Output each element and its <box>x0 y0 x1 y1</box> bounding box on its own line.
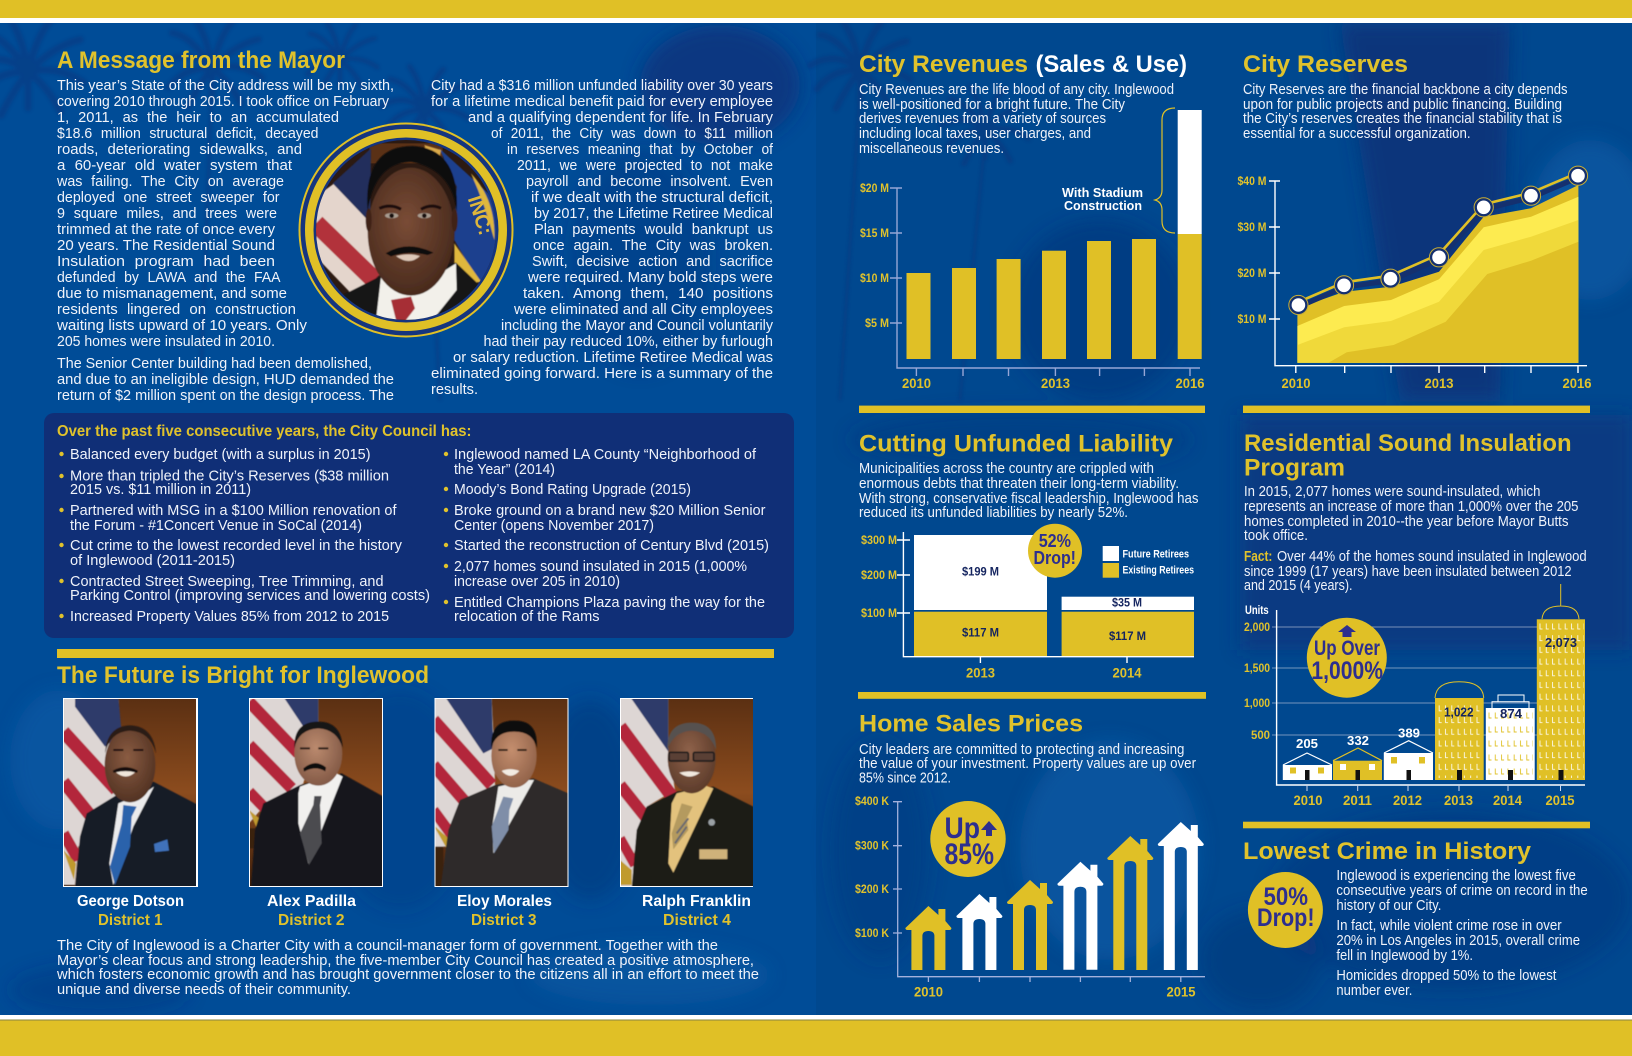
text block: crime description: history of our City. <box>1336 897 1441 914</box>
callout: 50% drop: 50% <box>1264 883 1308 911</box>
text block: mayor message left column <box>56 77 394 404</box>
building chart: homes insulated: 500 <box>1251 730 1270 742</box>
building: 2015 <box>1537 584 1585 780</box>
legend: retirees: Existing Retirees <box>1122 565 1194 577</box>
area chart: reserves: $30 M <box>1238 222 1266 234</box>
bullet list: left column: Increased Property Values 85% from 2012 to 2015 <box>70 608 389 625</box>
text block: mayor message right column: and a qualifying dependent for life. In February <box>468 109 773 126</box>
text block: reserves description: essential for a successful organization. <box>1243 125 1471 142</box>
bottom gold band <box>0 1015 1632 1056</box>
text block: mayor message left column: covering 2010 through 2015. I took office on February <box>57 93 389 110</box>
heading: lowest crime: Lowest Crime in History <box>1243 838 1532 865</box>
house chart: home prices: $400 K <box>855 796 890 808</box>
bar chart: revenues <box>860 108 1205 391</box>
house: 2010: 205 <box>1296 736 1318 751</box>
bar chart: revenues: Construction <box>1064 198 1142 213</box>
text block: crime description: fell in Inglewood by 1%. <box>1336 947 1473 964</box>
area chart: reserves: $10 M <box>1238 314 1266 326</box>
bullet list: left column <box>59 446 430 625</box>
stacked bar chart: liability <box>861 524 1194 681</box>
callout: up over 1,000% <box>1307 618 1387 698</box>
panel: a message from the mayor <box>56 47 774 404</box>
text block: mayor message left column: was failing. The City on average <box>56 173 284 190</box>
text block: council description: unique and diverse needs of their community. <box>57 981 351 998</box>
heading: sound insulation: Residential Sound Insulation <box>1244 430 1572 457</box>
text block: revenues description: derives revenues from a variety of sources <box>859 110 1106 127</box>
house: 2010 <box>1283 736 1332 780</box>
text block: mayor message left column: and due to an ineligible design, HUD demanded the <box>57 371 394 388</box>
bullet list: left column: More than tripled the City’s Reserves ($38 million <box>70 468 389 484</box>
text block: insulation description: homes completed in 2010--the year before Mayor Butts <box>1244 513 1568 530</box>
bullet list: left column: of Inglewood (2011-2015) <box>70 552 235 569</box>
bar chart: revenues: 2010 <box>902 376 931 391</box>
text block: mayor message right column: were eliminated and all City employees <box>513 301 773 318</box>
text block: mayor message left column: 205 homes were insulated in 2010. <box>57 333 275 350</box>
text block: crime description: Homicides dropped 50% to the lowest <box>1336 967 1557 984</box>
house chart: home prices: $100 K <box>855 928 890 940</box>
top gold band <box>0 0 1632 23</box>
house: 2012 <box>1384 726 1433 780</box>
text block: mayor message left column: roads, deteriorating sidewalks, and <box>57 141 302 158</box>
text block: insulation description: represents an increase of more than 1,000% over the 205 <box>1244 498 1578 515</box>
house: 2011: 332 <box>1347 733 1369 748</box>
council names and districts: District 4 <box>663 912 731 929</box>
area chart: reserves: 2013 <box>1424 376 1454 391</box>
text block: mayor message left column: trimmed at the rate of once every <box>57 221 275 238</box>
text block: mayor message right column: including the Mayor and Council voluntarily <box>501 317 773 334</box>
building: 2015: 2,073 <box>1545 636 1577 650</box>
text block: liability description: With strong, conservative fiscal leadership, Inglewood has <box>859 490 1198 507</box>
text block: insulation description: since 1999 (17 years) have been insulated between 2012 <box>1244 563 1572 580</box>
text block: reserves description: City Reserves are the financial backbone a city depends <box>1243 81 1568 98</box>
heading: city revenues <box>859 51 1187 78</box>
text block: revenues description: miscellaneous revenues. <box>859 140 1004 157</box>
heading: city revenues: City Revenues <box>859 51 1028 78</box>
bullet list: left column: the Forum - #1Concert Venue in SoCal (2014) <box>70 517 362 534</box>
bullet list: right column: the Year” (2014) <box>454 461 555 478</box>
building chart: homes insulated: 2014 <box>1493 793 1522 808</box>
building chart: homes insulated: 2013 <box>1444 793 1473 808</box>
house chart: home prices: 2015 <box>1166 985 1196 1000</box>
building: 2013 <box>1435 682 1484 780</box>
legend: retirees: Future Retirees <box>1122 549 1189 561</box>
callout: 52% drop <box>1028 524 1082 578</box>
house chart: home prices: $300 K <box>855 841 890 853</box>
bullet list: right column: Entitled Champions Plaza paving the way for the <box>454 594 765 611</box>
text block: insulation description: In 2015, 2,077 homes were sound-insulated, which <box>1244 483 1540 500</box>
text block: mayor message left column: due to mismanagement, and some <box>57 285 287 302</box>
bar chart: revenues: With Stadium <box>1062 185 1143 200</box>
legend: retirees <box>1103 546 1194 578</box>
text block: revenues description <box>859 81 1174 157</box>
bar chart: revenues: 2013 <box>1041 376 1070 391</box>
text block: mayor message right column: or salary reduction. Lifetime Retiree Medical was <box>453 349 773 366</box>
text block: mayor message right column: taken. Among them, 140 positions <box>523 285 773 302</box>
heading: future is bright: The Future is Bright for Inglewood <box>57 662 429 689</box>
text block: insulation description: Fact: <box>1244 548 1272 565</box>
text block: revenues description: City Revenues are the life blood of any city. Inglewood <box>859 81 1174 98</box>
text block: mayor message right column: payroll and become insolvent. Even <box>526 173 773 190</box>
building chart: homes insulated: 1,000 <box>1244 698 1270 710</box>
text block: reserves description: the City’s reserves creates the financial stability that is <box>1243 110 1562 127</box>
portrait: mayor in gold ring <box>298 122 514 338</box>
text block: mayor message right column: in reserves meaning that by October of <box>507 141 774 158</box>
bullet list: right column: Broke ground on a brand new $20 Million Senior <box>454 502 766 519</box>
heading: sound insulation <box>1244 430 1572 482</box>
text block: mayor message left column: deployed one street sweeper for <box>57 189 280 206</box>
text block: mayor message left column: 9 square miles, and trees were <box>57 205 277 222</box>
text block: mayor message left column: $18.6 million structural deficit, decayed <box>57 125 318 142</box>
text block: insulation description <box>1244 483 1587 594</box>
callout: 52% drop: 52% <box>1039 531 1071 551</box>
text block: mayor message left column: This year’s State of the City address will be my sixth, <box>57 77 394 94</box>
callout: up 85% <box>930 801 1006 877</box>
text block: insulation description: took office. <box>1244 527 1308 544</box>
text block: mayor message right column: for a lifetime medical benefit paid for every employee <box>431 93 773 110</box>
bar chart: revenues: $5 M <box>865 318 889 330</box>
bullet list: right column: relocation of the Rams <box>454 608 600 625</box>
text block: crime description <box>1336 867 1588 999</box>
text block: insulation description: and 2015 (4 years). <box>1244 577 1352 594</box>
bullet list: left column: Cut crime to the lowest recorded level in the history <box>70 537 402 554</box>
heading: unfunded liability: Cutting Unfunded Liability <box>859 431 1174 458</box>
bullet list: right column: Started the reconstruction of Century Blvd (2015) <box>454 537 769 554</box>
stacked bar chart: liability: $200 M <box>861 570 897 582</box>
stacked bar chart: liability: $100 M <box>861 608 897 620</box>
text block: revenues description: is well-positioned for a bright future. The City <box>859 96 1125 113</box>
panel: cutting unfunded liability <box>859 431 1198 681</box>
text block: mayor message left column: return of $2 million spent on the design process. The <box>57 387 394 404</box>
text block: crime description: number ever. <box>1336 982 1412 999</box>
text block: home sales description: the value of your investment. Property values are up over <box>859 755 1196 772</box>
building: 2013: 1,022 <box>1444 706 1474 720</box>
bar chart: revenues: $15 M <box>860 228 889 240</box>
house chart: home prices: $200 K <box>855 884 890 896</box>
council names and districts <box>77 893 751 929</box>
text block: mayor message left column: The Senior Center building had been demolished, <box>57 355 372 372</box>
heading: home sales prices: Home Sales Prices <box>859 711 1083 738</box>
house: 2011 <box>1333 733 1382 780</box>
panel: city council accomplishments <box>44 413 794 638</box>
bullet list: right column: Moody’s Bond Rating Upgrade (2015) <box>454 481 691 498</box>
stacked bar chart: liability: $35 M <box>1112 598 1142 610</box>
bar chart: revenues: $10 M <box>860 273 889 285</box>
bar chart: revenues: 2016 <box>1176 376 1205 391</box>
callout: up 85%: 85% <box>944 838 994 871</box>
heading: city revenues: (Sales & Use) <box>1036 51 1187 78</box>
text block: mayor message left column: 20 years. The Residential Sound <box>57 237 275 254</box>
panel: residential sound insulation program <box>1244 430 1587 808</box>
heading: message from the mayor: A Message from the Mayor <box>57 47 345 74</box>
heading: sound insulation: Program <box>1244 455 1345 482</box>
area chart: reserves <box>1238 166 1592 391</box>
text block: mayor message right column: had their pay reduced 10%, either by furlough <box>484 333 773 350</box>
text block: reserves description: upon for public projects and public financing. Building <box>1243 96 1562 113</box>
house: 2012: 389 <box>1398 726 1420 741</box>
photo: George Dotson <box>63 697 200 888</box>
text block: mayor message left column: Insulation program had been <box>57 253 275 270</box>
building chart: homes insulated: 2011 <box>1343 793 1372 808</box>
bullet list: right column: Center (opens November 2017) <box>454 517 654 534</box>
stacked bar chart: liability: $117 M <box>1109 631 1146 643</box>
panel: lowest crime in history <box>1243 838 1588 999</box>
text block: home sales description <box>859 741 1196 787</box>
text block: insulation description: Over 44% of the homes sound insulated in Inglewood <box>1277 548 1587 565</box>
text block: liability description: enormous debts that threaten their long-term viability. <box>859 475 1179 492</box>
council names and districts: District 3 <box>471 912 537 929</box>
council names and districts: District 1 <box>98 912 163 929</box>
text block: mayor message right column: once again. The City was broken. <box>533 237 773 254</box>
callout: 50% drop <box>1248 872 1323 948</box>
text block: crime description: In fact, while violent crime rose in over <box>1336 917 1562 934</box>
council names and districts: Eloy Morales <box>457 893 552 910</box>
text block: mayor message right column: eliminated going forward. Here is a summary of the <box>431 365 773 382</box>
photo: Eloy Morales <box>433 697 570 888</box>
bar chart: revenues: $20 M <box>860 183 889 195</box>
text block: mayor message right column <box>431 77 774 398</box>
text block: mayor message right column: Swift, decisive action and sacrifice <box>532 253 773 270</box>
bullet list: right column: increase over 205 in 2010) <box>454 573 620 590</box>
bullet list: left column: 2015 vs. $11 million in 2011) <box>70 481 251 498</box>
council names and districts: George Dotson <box>77 893 184 910</box>
building chart: homes insulated: 2012 <box>1393 793 1422 808</box>
text block: mayor message left column: defunded by LAWA and the FAA <box>57 269 280 286</box>
photo: Alex Padilla <box>249 697 386 888</box>
council names and districts: Ralph Franklin <box>642 893 751 910</box>
house chart: home prices: 2010 <box>914 985 943 1000</box>
text block: mayor message right column: if we dealt with the structural deficit, <box>531 189 773 206</box>
text block: crime description: 20% in Los Angeles in 2015, overall crime <box>1336 932 1580 949</box>
bullet list: left column: Balanced every budget (with a surplus in 2015) <box>70 446 371 463</box>
building chart: homes insulated: 2015 <box>1546 793 1575 808</box>
text block: liability description: Municipalities across the country are crippled with <box>859 460 1154 477</box>
panel: city revenues <box>859 51 1205 391</box>
building: 2014: 874 <box>1500 707 1522 721</box>
text block: council description <box>56 937 759 998</box>
text block: reserves description <box>1243 81 1568 142</box>
house chart: home prices <box>855 796 1205 1000</box>
bullet list: right column: 2,077 homes sound insulated in 2015 (1,000% <box>454 558 747 575</box>
building chart: homes insulated: 2,000 <box>1244 622 1270 634</box>
text block: mayor message right column: Plan payments would bankrupt us <box>534 221 773 238</box>
photo: Ralph Franklin <box>620 697 757 888</box>
callout: up 85%: Up <box>944 812 980 845</box>
bullet list: left column: Contracted Street Sweeping, Tree Trimming, and <box>70 573 384 590</box>
callout: 50% drop: Drop! <box>1257 904 1314 932</box>
text block: home sales description: 85% since 2012. <box>859 770 951 787</box>
stacked bar chart: liability: $199 M <box>962 567 999 579</box>
area chart: reserves: 2010 <box>1282 376 1310 391</box>
area chart: reserves: $20 M <box>1238 268 1266 280</box>
text block: mayor message right column: results. <box>431 381 478 398</box>
stacked bar chart: liability: 2013 <box>966 666 995 681</box>
text block: liability description <box>859 460 1198 521</box>
text block: mayor message right column: of 2011, the City was down to $11 million <box>491 125 773 142</box>
callout: up over 1,000%: Up Over <box>1314 637 1380 660</box>
text block: mayor message left column: waiting lists upward of 10 years. Only <box>56 317 307 334</box>
bullet list: right column <box>444 446 769 625</box>
text block: council description: Mayor’s clear focus and strong leadership, the five-member City Council has created a positive atmosphere, <box>57 952 754 969</box>
building chart: homes insulated: Units <box>1245 605 1269 617</box>
building chart: homes insulated: 1,500 <box>1244 663 1270 675</box>
stacked bar chart: liability: 2014 <box>1112 666 1142 681</box>
area chart: reserves: $40 M <box>1238 176 1266 188</box>
text block: mayor message right column: City had a $316 million unfunded liability over 30 years <box>431 77 773 94</box>
portrait: mayor in gold ring: INC: <box>463 193 497 238</box>
text block: mayor message right column: were required. Many bold steps were <box>527 269 773 286</box>
text block: mayor message left column: 1, 2011, as the heir to an accumulated <box>57 109 339 126</box>
building: 2014 <box>1486 695 1535 780</box>
heading: over the past five years: Over the past five consecutive years, the City Council has: <box>57 423 472 440</box>
panel: the future is bright <box>56 662 759 998</box>
text block: mayor message right column: 2011, we were projected to not make <box>517 157 773 174</box>
council names and districts: Alex Padilla <box>267 893 356 910</box>
text block: mayor message left column: a 60-year old water system that <box>57 157 293 174</box>
text block: mayor message left column: residents lingered on construction <box>57 301 296 318</box>
building chart: homes insulated <box>1244 584 1585 808</box>
stacked bar chart: liability: $300 M <box>861 535 897 547</box>
text block: crime description: consecutive years of crime on record in the <box>1336 882 1588 899</box>
panel: home sales prices <box>855 711 1205 1000</box>
bullet list: right column: Inglewood named LA County “Neighborhood of <box>454 446 757 463</box>
area chart: reserves: 2016 <box>1562 376 1592 391</box>
stacked bar chart: liability: $117 M <box>962 628 999 640</box>
bullet list: left column: Parking Control (improving services and lowering costs) <box>70 587 430 604</box>
text block: liability description: reduced its unfunded liabilities by nearly 52%. <box>859 504 1128 521</box>
text block: council description: which fosters economic growth and has brought government closer to the citizens all in an effort to meet the <box>56 966 759 983</box>
text block: revenues description: including local taxes, user charges, and <box>859 125 1091 142</box>
heading: city reserves: City Reserves <box>1243 51 1408 78</box>
bullet list: left column: Partnered with MSG in a $100 Million renovation of <box>70 502 397 519</box>
text block: mayor message right column: by 2017, the Lifetime Retiree Medical <box>534 205 773 222</box>
text block: crime description: Inglewood is experiencing the lowest five <box>1336 867 1576 884</box>
council names and districts: District 2 <box>278 912 345 929</box>
building chart: homes insulated: 2010 <box>1294 793 1322 808</box>
callout: up over 1,000%: 1,000% <box>1311 657 1383 685</box>
callout: 52% drop: Drop! <box>1034 548 1076 568</box>
text block: council description: The City of Inglewood is a Charter City with a council-manager form of government. Together with the <box>57 937 718 954</box>
panel: city reserves <box>1238 51 1592 391</box>
text block: home sales description: City leaders are committed to protecting and increasing <box>859 741 1184 758</box>
